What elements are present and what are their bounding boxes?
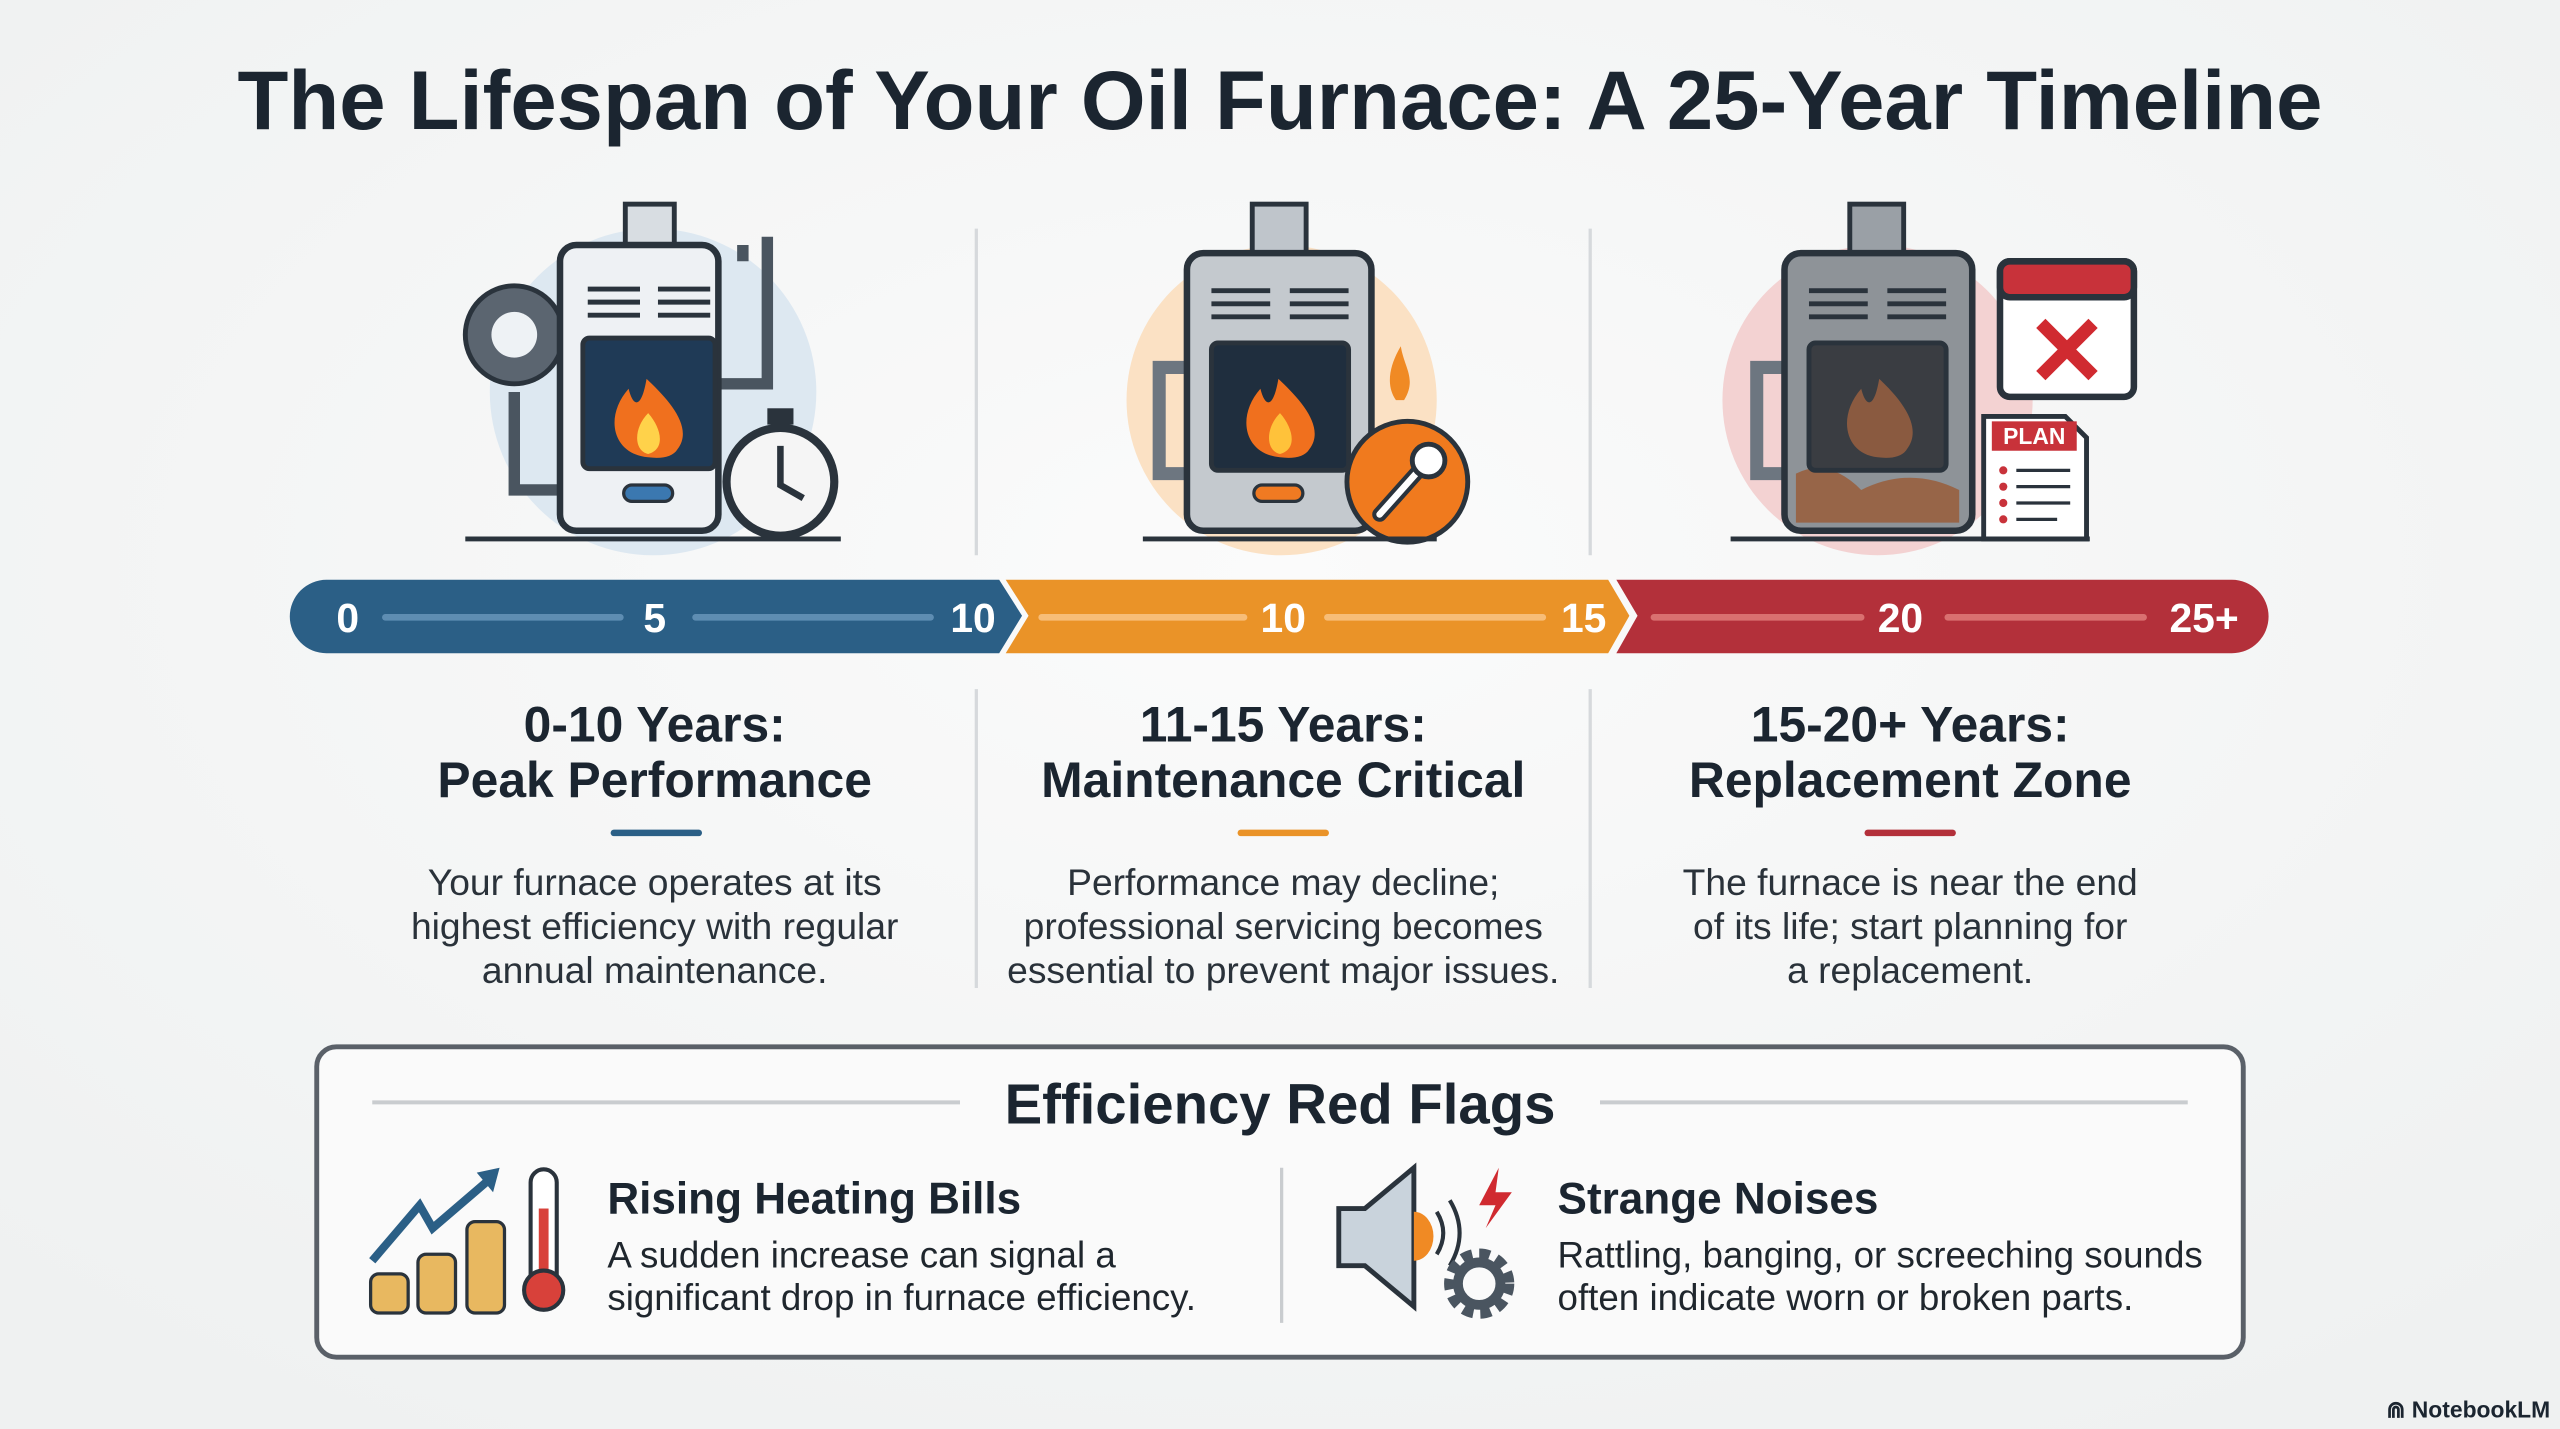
panel: 0-10 years [411, 696, 898, 991]
text: rising heating bills: Rising Heating Bills [607, 1174, 1021, 1223]
heading: efficiency red flags: Efficiency Red Flags [1005, 1073, 1555, 1136]
icon: strange noises [1339, 1168, 1512, 1311]
panel: 11-15 years [1007, 696, 1559, 991]
text: strange noises [1558, 1174, 2203, 1318]
timeline bar: 10 [1261, 595, 1306, 641]
timeline bar [290, 580, 2269, 653]
title: The Lifespan of Your Oil Furnace: A 25-Year Timeline [238, 54, 2322, 147]
icon: new furnace [465, 204, 841, 555]
timeline bar: 15 [1561, 595, 1606, 641]
panel: 11-15 years: Maintenance Critical [1041, 752, 1525, 808]
icon: aging furnace with wrench [1127, 204, 1468, 555]
panel: 0-10 years: Peak Performance [437, 752, 872, 808]
panel: 15-20+ years: 15-20+ Years: [1751, 696, 2070, 752]
panel: 0-10 years: highest efficiency with regular [411, 905, 898, 947]
timeline bar: 25+ [2169, 595, 2239, 641]
panel: efficiency red flags [317, 1047, 2243, 1357]
panel: 11-15 years: essential to prevent major issues. [1007, 949, 1559, 991]
icon: rusted furnace with calendar and plan: PLAN [2003, 423, 2065, 449]
panel: 15-20+ years: of its life; start planning for [1693, 905, 2127, 947]
text: rising heating bills: significant drop in furnace efficiency. [607, 1277, 1196, 1318]
timeline bar: 5 [643, 595, 666, 641]
panel: 15-20+ years: The furnace is near the end [1683, 861, 2138, 903]
panel: 15-20+ years: Replacement Zone [1689, 752, 2132, 808]
watermark: ⋒ NotebookLM [2386, 1397, 2550, 1423]
text: strange noises: Rattling, banging, or screeching sounds [1558, 1234, 2203, 1275]
timeline bar: 0 [336, 595, 359, 641]
panel: 15-20+ years [1683, 696, 2138, 991]
text: strange noises: Strange Noises [1558, 1174, 1878, 1223]
timeline bar: 10 [950, 595, 996, 641]
panel: 11-15 years: 11-15 Years: [1140, 696, 1427, 752]
text: rising heating bills [607, 1174, 1196, 1318]
panel: 0-10 years: annual maintenance. [482, 949, 827, 991]
panel: 11-15 years: Performance may decline; [1067, 861, 1499, 903]
panel: 0-10 years: Your furnace operates at its [428, 861, 882, 903]
text: rising heating bills: A sudden increase can signal a [607, 1234, 1116, 1275]
panel: 11-15 years: professional servicing becomes [1024, 905, 1543, 947]
icon: rising bills [371, 1168, 563, 1313]
panel: 15-20+ years: a replacement. [1787, 949, 2033, 991]
timeline bar: 20 [1878, 595, 1923, 641]
panel: 0-10 years: 0-10 Years: [524, 696, 786, 752]
text: strange noises: often indicate worn or broken parts. [1558, 1277, 2133, 1318]
icon: rusted furnace with calendar and plan [1722, 204, 2134, 555]
